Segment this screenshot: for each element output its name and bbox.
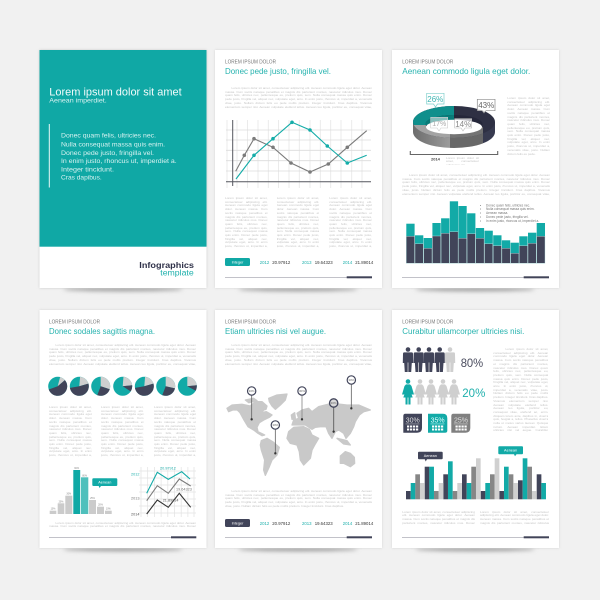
yearly figures: 2013 — [302, 521, 312, 526]
chart legend list: • — [480, 207, 481, 211]
panel: world map page — [215, 310, 382, 551]
histogram — [50, 467, 112, 514]
panel: pies and charts page — [40, 310, 206, 551]
mini line chart: 19.64323 — [176, 488, 192, 492]
yearly figures: 20.97912 — [272, 521, 291, 526]
map pin: Russia — [347, 376, 355, 409]
cover accent line — [49, 124, 50, 188]
callout: Aenean teal: Aenean — [504, 449, 517, 453]
yearly figures: 19.64323 — [315, 521, 333, 526]
badge 30%: 30% — [406, 418, 420, 424]
page heading: Etiam ultricies nisi vel augue. — [225, 326, 326, 336]
cover list text — [61, 133, 177, 182]
yearly figures: 21.89014 — [355, 260, 374, 265]
cover list text: Donec pede justo, fringilla vel. — [61, 150, 154, 157]
stat 20%: 20% — [462, 386, 486, 400]
chart legend list: Nulla consequat massa quis enim. — [486, 207, 535, 211]
pie charts row — [48, 377, 197, 396]
callout: Aenean dark — [418, 452, 443, 462]
chart legend list: Donec quam felis, ultricies nec. — [486, 203, 530, 207]
yearly figures: 19.64323 — [315, 260, 333, 265]
female icons — [402, 379, 460, 404]
page kicker: LOREM IPSUM DOLOR — [225, 320, 276, 326]
chart legend list: • — [480, 219, 481, 223]
world map — [227, 376, 370, 475]
yearly figures: 21.89014 — [355, 521, 374, 526]
page kicker: LOREM IPSUM DOLOR — [402, 60, 454, 66]
chart legend list: Aenean massa. — [486, 211, 508, 215]
button: Integer: Integer — [232, 260, 244, 264]
histogram: 90% — [74, 467, 80, 470]
line chart — [226, 120, 371, 188]
year bracket — [410, 151, 498, 154]
callout 26%: 26% — [427, 95, 443, 104]
badge 35%: 35% — [431, 418, 445, 424]
map pin: Asia — [329, 399, 338, 433]
yearly figures: 2014 — [343, 521, 353, 526]
right text column: Lorem ipsum dolor sit amet, consectetuer adipiscing elit. Aenean commodo ligula eget dolor. Aenean massa. Cum sociis natoque penatibus et magnis dis parturient montes, nascetur ridiculus mus. Donec quam felis, ultricies nec, pellentesque eu, pretium quis, sem. Nulla consequat massa quis enim. Donec pede justo, fringilla vel, aliquet nec, vulputate eget, arcu. In enim justo, rhoncus ut, imperdiet a, venenatis vitae, justo. Nullam dictum felis eu pede. — [507, 97, 550, 156]
yearly figures: 2012 — [260, 521, 270, 526]
map pin: Asia: 30% — [331, 401, 337, 405]
mini line chart — [131, 466, 196, 517]
yearly figures: 20.97912 — [272, 260, 291, 265]
page kicker: LOREM IPSUM DOLOR — [49, 320, 100, 326]
panel: cover page — [40, 50, 206, 291]
footer rule — [402, 276, 549, 278]
page kicker: LOREM IPSUM DOLOR — [402, 320, 454, 326]
map pin: North America: 30% — [249, 389, 255, 393]
histogram: 25% — [90, 497, 96, 500]
button: Integer: Integer — [232, 522, 244, 526]
cover teal block — [40, 50, 206, 247]
callout 43%: 43% — [478, 101, 494, 110]
footer rule — [49, 536, 196, 538]
map pin: Europe — [298, 387, 306, 420]
cover title: Lorem ipsum dolor sit amet — [49, 86, 182, 98]
histogram: 20% — [59, 500, 64, 503]
chart legend list: • — [480, 203, 481, 207]
cover brand — [139, 261, 195, 277]
callout 14%: 14% — [455, 120, 471, 129]
callout: Aenean dark: Aenean — [424, 454, 437, 458]
chart legend list: • — [480, 215, 481, 219]
cover list text: Nulla consequat massa quis enim. — [61, 141, 165, 148]
button: Integer — [225, 519, 250, 527]
callout: Aenean — [92, 478, 117, 488]
map pin: South America — [271, 421, 279, 454]
yearly figures: 2012 — [260, 260, 270, 265]
histogram: 10% — [51, 508, 56, 510]
map pin: North America — [247, 387, 256, 420]
button: Integer — [225, 258, 250, 266]
cover subtitle: Aenean imperdiet. — [49, 98, 107, 105]
footer rule — [225, 536, 372, 538]
chart legend list: • — [480, 211, 481, 215]
year label: 2014 — [431, 157, 441, 162]
panel: line chart page — [215, 50, 382, 291]
male icons — [403, 347, 455, 372]
histogram: 80% — [82, 474, 88, 477]
callout: Aenean: Aenean — [98, 480, 111, 484]
grouped bar chart — [406, 458, 546, 499]
yearly figures — [260, 260, 374, 265]
footer rule — [402, 536, 549, 538]
cover list text: Donec quam felis, ultricies nec. — [61, 133, 156, 140]
yearly figures: 2014 — [343, 260, 353, 265]
badge 25% — [451, 414, 470, 433]
cover list text: Integer tincidunt. — [61, 166, 114, 173]
map pin: South America: 30% — [272, 423, 279, 427]
callout: Aenean teal — [498, 446, 523, 456]
yearly figures: 2013 — [302, 260, 312, 265]
yearly figures — [260, 521, 374, 526]
chart legend list: In enim justo, rhoncus ut, imperdiet a. — [486, 219, 539, 223]
badge 35% — [428, 414, 447, 433]
histogram: 20% — [98, 504, 104, 507]
mini line chart: 2014 — [131, 512, 139, 516]
badge 25%: 25% — [454, 418, 468, 424]
page heading: Curabitur ullamcorper ultricies nisi. — [402, 326, 524, 336]
stat 80%: 80% — [461, 356, 483, 370]
stacked bar chart — [406, 201, 545, 263]
chart legend list: Donec pede justo, fringilla vel. — [486, 215, 529, 219]
footer rule — [225, 276, 372, 278]
mini line chart: 2013 — [131, 496, 139, 500]
cover list text: Cras dapibus. — [61, 175, 102, 182]
cover brand: Infographics — [139, 261, 195, 270]
histogram: 30% — [66, 493, 72, 496]
3D donut chart — [413, 93, 495, 148]
mini line chart: 2012 — [131, 472, 139, 476]
map pin: Europe: 30% — [299, 389, 305, 393]
map pin: Russia: 30% — [348, 378, 355, 382]
histogram: 10% — [106, 508, 112, 510]
page kicker: LOREM IPSUM DOLOR — [225, 60, 276, 66]
chart legend list — [480, 203, 539, 223]
cover list text: In enim justo, rhoncus ut, imperdiet a. — [61, 158, 177, 165]
callout 17%: 17% — [432, 121, 446, 128]
cover brand: template — [160, 268, 194, 277]
mini line chart: 21.89014 — [163, 498, 179, 502]
page heading: Aenean commodo ligula eget dolor. — [402, 66, 530, 76]
page heading: Donec sodales sagittis magna. — [49, 326, 155, 336]
panel: donut and stacked bars page — [392, 50, 559, 291]
mini line chart: 20.97912 — [160, 466, 176, 470]
badge 30% — [403, 414, 422, 433]
page heading: Donec pede justo, fringilla vel. — [225, 66, 331, 76]
panel: people stats page — [392, 310, 559, 551]
